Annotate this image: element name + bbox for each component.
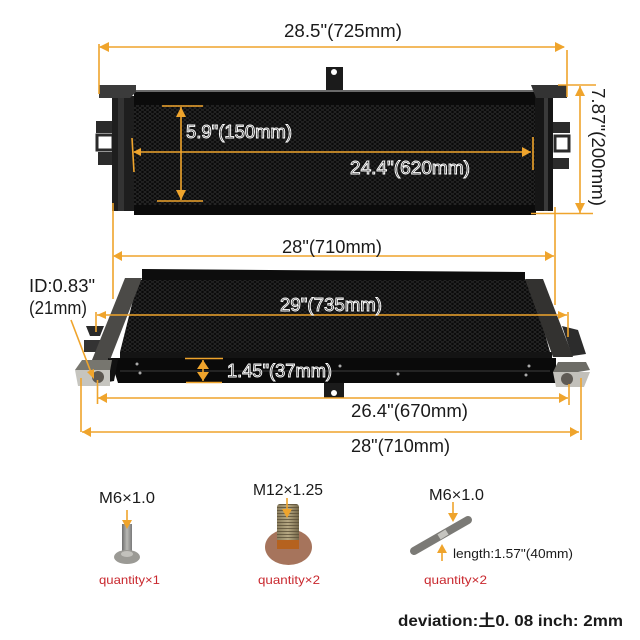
- dimension: thickness 1.45 in: 1.45"(37mm): [227, 361, 332, 381]
- dimension: core width 24.4 in: [132, 137, 533, 178]
- dimension: 29 in span: [96, 295, 568, 337]
- dimension: 28 in overall: 28"(710mm): [351, 436, 450, 456]
- dimension: 26.4 in: [98, 380, 569, 421]
- part: M6 screw: quantity×1: [99, 573, 160, 587]
- part: M12 bolt: quantity×2: [258, 573, 320, 587]
- dimension: 28 in upper width: [113, 203, 555, 305]
- part: M6 screw: [99, 490, 160, 587]
- part: M6 screw: M6×1.0: [99, 490, 155, 507]
- note: deviation: deviation:土0. 08 inch: 2mm: [398, 612, 623, 630]
- bottom radiator photo: [75, 269, 590, 398]
- dimension: overall width 28.5 in: 28.5"(725mm): [284, 21, 402, 41]
- dimension: core height 5.9 in: [157, 106, 292, 201]
- dimension: 28 in overall: [81, 378, 581, 456]
- dimension: height 7.87 in: 7.87"(200mm): [588, 88, 608, 206]
- label: inner diameter with leader arrow: [29, 276, 95, 379]
- part: M6 stud: [414, 487, 573, 587]
- label: inner diameter with leader arrow: (21mm): [29, 298, 87, 318]
- dimension: 28 in upper width: 28"(710mm): [282, 237, 382, 257]
- dimension: core width 24.4 in: 24.4"(620mm): [350, 158, 470, 178]
- dimension: 26.4 in: 26.4"(670mm): [351, 401, 468, 421]
- part: M6 stud: length:1.57"(40mm): [453, 546, 573, 561]
- part: M6 stud: quantity×2: [424, 573, 487, 587]
- part: M12 bolt: [253, 482, 323, 587]
- dimension: overall width 28.5 in: [99, 21, 567, 97]
- top radiator photo: [96, 67, 570, 215]
- dimension: thickness 1.45 in: [185, 358, 332, 382]
- label: inner diameter with leader arrow: ID:0.83": [29, 276, 95, 296]
- dimension: height 7.87 in: [531, 85, 608, 214]
- dimension: 29 in span: 29"(735mm): [280, 295, 382, 315]
- part: M12 bolt: M12×1.25: [253, 482, 323, 499]
- dimension: core height 5.9 in: 5.9"(150mm): [186, 122, 292, 142]
- part: M6 stud: M6×1.0: [429, 487, 484, 504]
